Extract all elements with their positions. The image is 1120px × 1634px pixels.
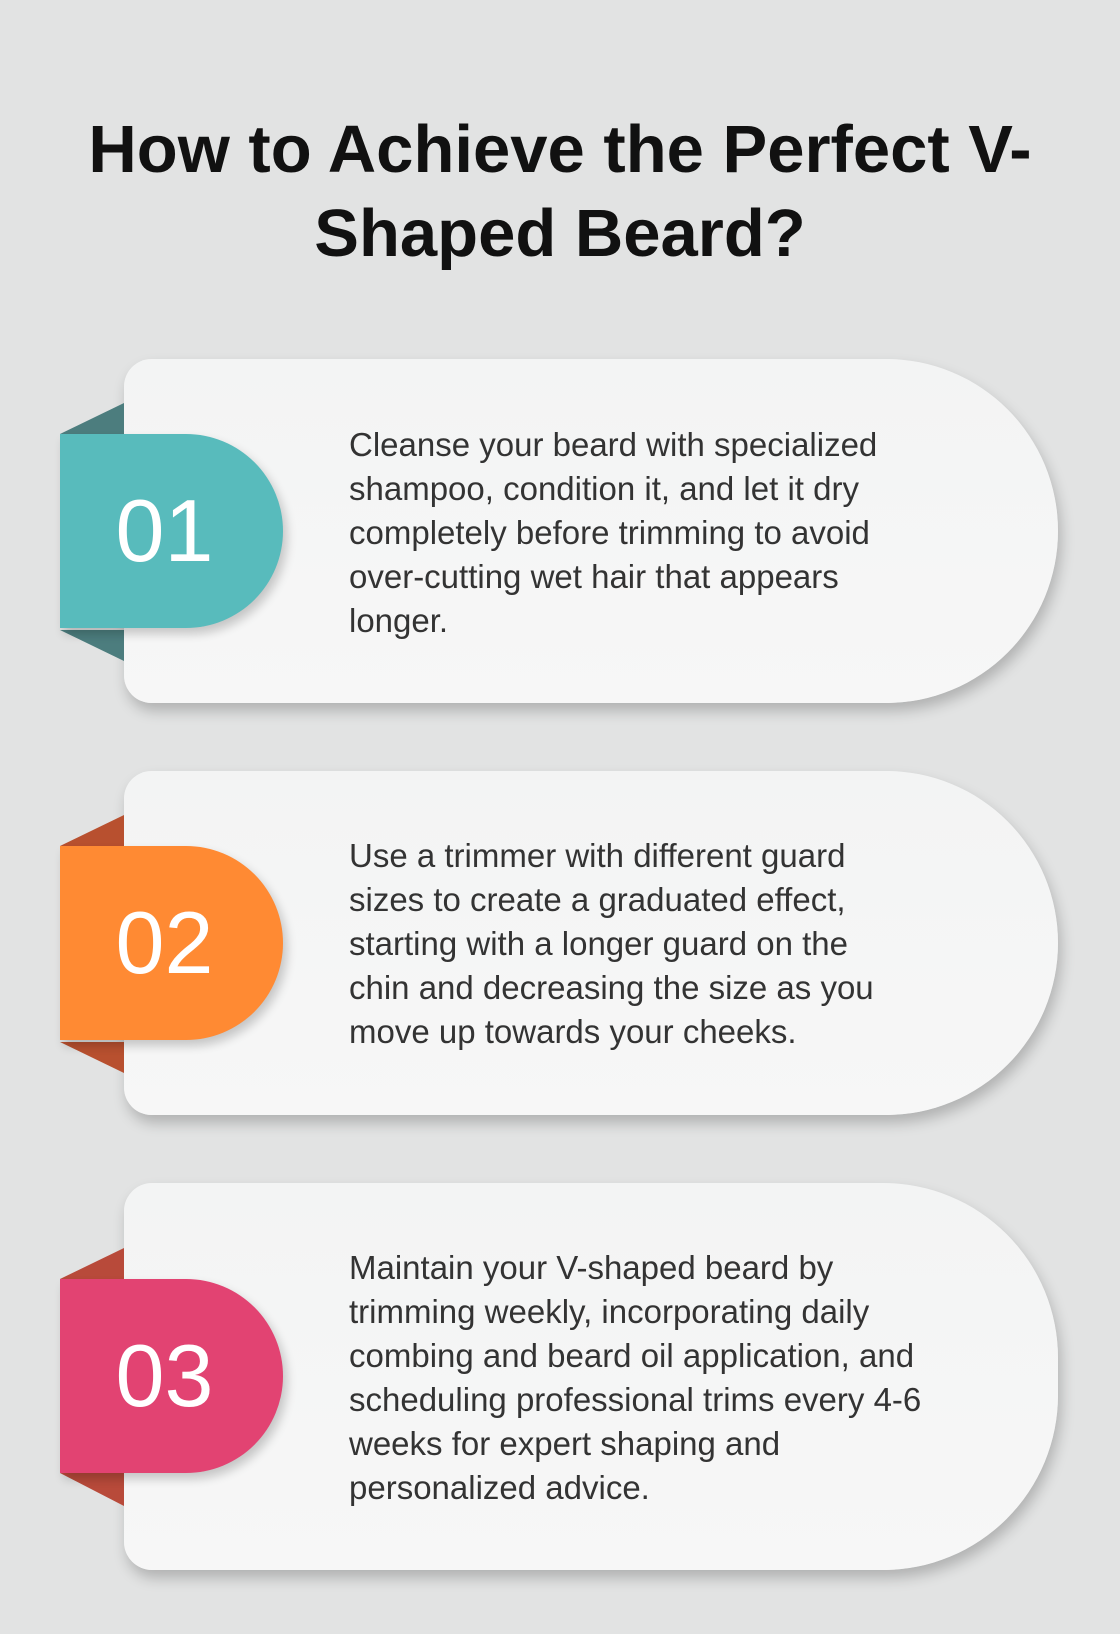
text: step 3: combing and beard oil application, and	[349, 1337, 914, 1374]
title	[88, 112, 1032, 271]
fold: step 1	[60, 403, 124, 661]
fold: step 3	[60, 1248, 124, 1506]
text: step 2: move up towards your cheeks.	[349, 1013, 797, 1050]
number tab 01	[60, 434, 283, 628]
text: step 2: chin and decreasing the size as you	[349, 969, 874, 1006]
text: step 3: Maintain your V-shaped beard by	[349, 1249, 833, 1286]
text: step 2: starting with a longer guard on the	[349, 925, 848, 962]
text: step 1: shampoo, condition it, and let it dry	[349, 470, 859, 507]
fold: step 2	[60, 815, 124, 1073]
text: step 1	[349, 426, 877, 639]
text: step 3: personalized advice.	[349, 1469, 650, 1506]
text: step 3	[349, 1249, 921, 1506]
number tab 02	[60, 846, 283, 1040]
text: step 1: over-cutting wet hair that appears	[349, 558, 839, 595]
text: step 1: completely before trimming to avoid	[349, 514, 870, 551]
text: step 1: longer.	[349, 602, 448, 639]
text: step 2: sizes to create a graduated effect,	[349, 881, 846, 918]
number tab 01: 01	[116, 481, 213, 580]
panel: step 1	[124, 359, 1058, 703]
text: step 3: trimming weekly, incorporating daily	[349, 1293, 869, 1330]
text: step 2: Use a trimmer with different guard	[349, 837, 845, 874]
text: step 2	[349, 837, 874, 1050]
number tab 02: 02	[116, 893, 213, 992]
panel: step 2	[124, 771, 1058, 1115]
number tab 03	[60, 1279, 283, 1473]
text: step 3: scheduling professional trims every 4-6	[349, 1381, 921, 1418]
text: step 1: Cleanse your beard with specialized	[349, 426, 877, 463]
text: step 3: weeks for expert shaping and	[349, 1425, 780, 1462]
panel: step 3	[124, 1183, 1058, 1570]
title: How to Achieve the Perfect V-	[88, 112, 1032, 187]
number tab 03: 03	[116, 1326, 213, 1425]
title: Shaped Beard?	[314, 196, 806, 271]
